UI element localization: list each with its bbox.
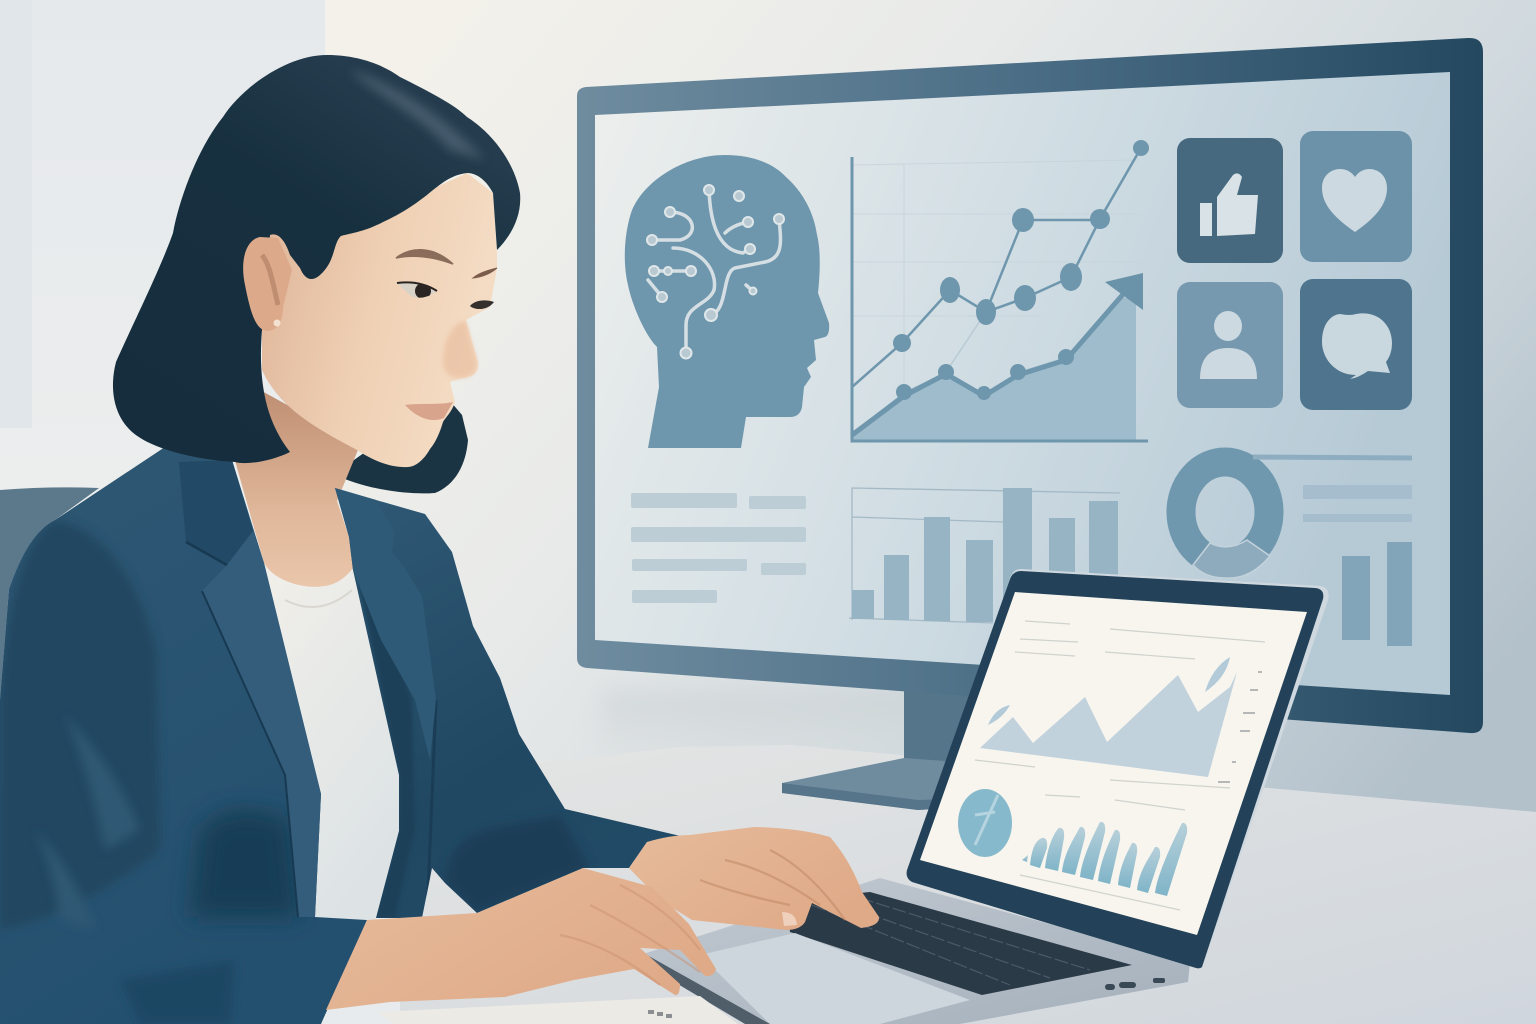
laptop area chart [980, 657, 1237, 777]
monitor screen [595, 72, 1450, 695]
right blazer panel and rear sleeve [335, 488, 689, 918]
desk paper [378, 996, 738, 1024]
monitor [577, 38, 1483, 733]
icon tile: thumbs up [1177, 138, 1283, 263]
line series [852, 148, 1141, 387]
left collar [179, 460, 253, 565]
ports [1105, 978, 1165, 990]
monitor frame [577, 38, 1483, 733]
neck [232, 390, 360, 587]
chart axes [852, 157, 1148, 441]
area series [852, 297, 1136, 440]
blazer [0, 447, 689, 1024]
chair [0, 487, 99, 700]
eyebrows [396, 250, 453, 264]
icon tile: heart [1300, 131, 1412, 262]
face [262, 173, 497, 467]
rear hand finger shading [700, 850, 845, 920]
front hand finger shading [560, 885, 700, 985]
laptop bars [1022, 822, 1187, 896]
arm shading [0, 520, 160, 930]
AI head icon [625, 155, 829, 448]
far eye [470, 300, 494, 309]
desk [400, 745, 1536, 1024]
ear [243, 237, 292, 331]
laptop front edge [634, 950, 770, 1024]
trend arrow head [1105, 273, 1143, 310]
text placeholder bars [631, 493, 806, 603]
trackpad [700, 933, 970, 1024]
right lapel [335, 488, 436, 760]
laptop pie [958, 789, 1012, 857]
white t-shirt [264, 563, 399, 920]
near eye [397, 283, 437, 298]
icon tile: person [1177, 282, 1283, 408]
legend lines and small bars [1253, 457, 1412, 646]
facial features [243, 237, 497, 420]
nose shading [443, 322, 477, 378]
monitor stand [782, 690, 1000, 810]
icon tile: speech bubbles [1300, 279, 1412, 410]
hand: front [326, 868, 716, 1010]
brain circuit traces [648, 190, 780, 353]
chart nodes [893, 140, 1149, 400]
laptop base [634, 878, 1190, 1024]
rear sleeve shading [445, 815, 590, 913]
laptop thin text lines [975, 621, 1265, 910]
hand: rear [629, 827, 879, 930]
bar chart [849, 488, 1120, 623]
laptop lid [907, 569, 1329, 968]
brain circuit nodes [647, 185, 784, 358]
hair back (under chin) [340, 395, 468, 493]
hair highlight [350, 70, 485, 160]
left lapel [202, 531, 321, 917]
grid lines [852, 160, 1140, 442]
growth chart [852, 140, 1149, 442]
blazer body and front sleeve [0, 447, 367, 1024]
laptop screen [920, 592, 1307, 935]
lips [405, 402, 453, 420]
donut chart [1181, 462, 1270, 578]
earring [274, 320, 280, 326]
hair [113, 55, 520, 463]
keyboard [786, 892, 1132, 995]
